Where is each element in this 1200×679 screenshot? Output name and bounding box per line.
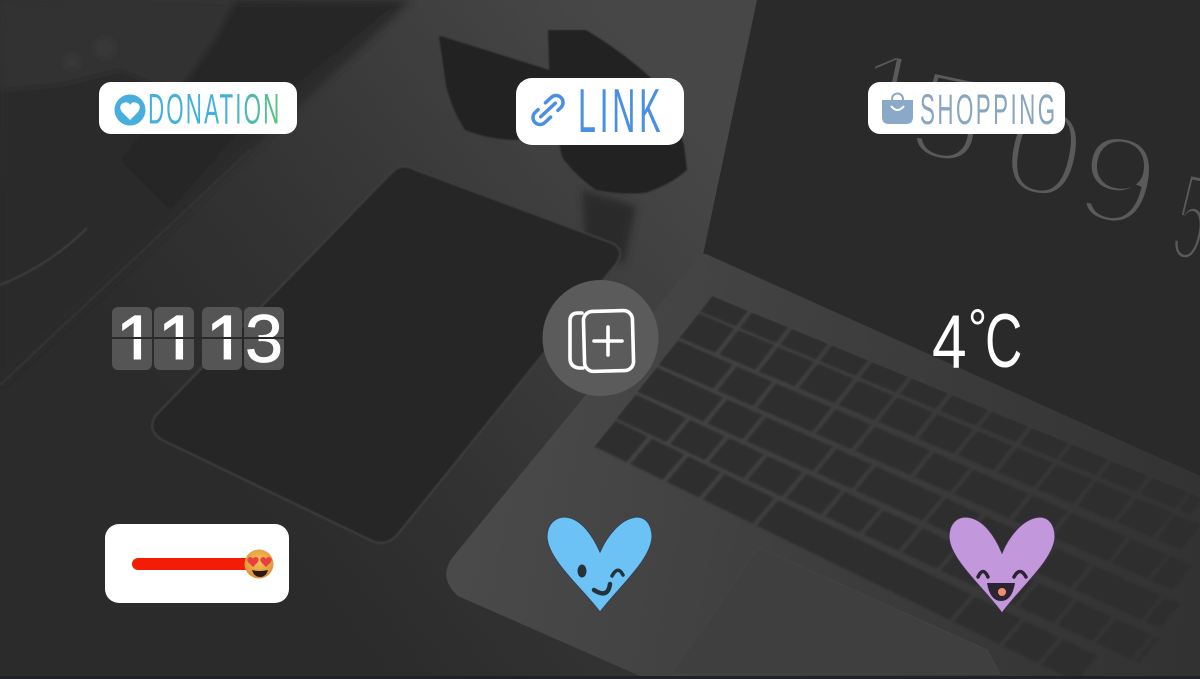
clock digits: 1	[158, 300, 199, 383]
label: link: LINK	[578, 77, 664, 146]
icon: shopping bag	[882, 94, 913, 124]
button: add sticker	[542, 280, 658, 396]
clock digits: 3	[245, 301, 283, 377]
label: shopping: SHOPPING	[920, 86, 1058, 134]
digits reflected on the laptop screen: 9	[1064, 103, 1172, 257]
icon: heart eyes emoji	[244, 550, 274, 578]
icon: stacked cards with plus	[570, 310, 634, 372]
clock digits: 1	[116, 300, 157, 383]
clock cards	[112, 307, 284, 370]
sticker: temperature	[932, 298, 1022, 384]
digits reflected on the laptop screen	[875, 58, 1200, 258]
sticker: temperature: 4	[932, 299, 967, 384]
digits reflected on the laptop screen: 5	[898, 42, 999, 194]
label: donation: DONATION	[148, 86, 281, 134]
clock digits	[122, 314, 280, 363]
camera and notebook on the left	[0, 0, 412, 385]
sticker: link	[516, 77, 684, 146]
digits reflected on the laptop screen: 1	[840, 22, 937, 173]
sunglasses	[439, 30, 687, 194]
laptop body	[446, 254, 1200, 676]
sticker: shopping	[868, 82, 1065, 134]
icon: chain link	[530, 93, 566, 127]
keyboard	[583, 304, 1200, 679]
sticker: laughing purple heart	[949, 517, 1055, 613]
sticker: flip clock	[112, 307, 284, 370]
shadow under the sunglasses	[582, 190, 636, 265]
sticker: temperature: °	[968, 298, 987, 361]
slider track	[132, 558, 254, 570]
eye and smile	[578, 564, 623, 593]
icon: heart in circle	[114, 94, 146, 126]
clock digits: 1	[206, 300, 247, 383]
digits reflected on the laptop screen: 0	[990, 75, 1098, 229]
notebook edge lines	[0, 150, 250, 385]
sticker: winking blue heart	[547, 517, 652, 612]
eyes and mouth	[978, 572, 1026, 601]
sticker: temperature: C	[985, 298, 1022, 383]
sticker: emoji slider	[105, 524, 289, 603]
trackpad	[672, 547, 1000, 674]
laptop screen	[703, 0, 1200, 476]
bottom edge	[0, 676, 1200, 679]
tablet	[152, 166, 620, 543]
sticker: donation	[99, 82, 297, 134]
